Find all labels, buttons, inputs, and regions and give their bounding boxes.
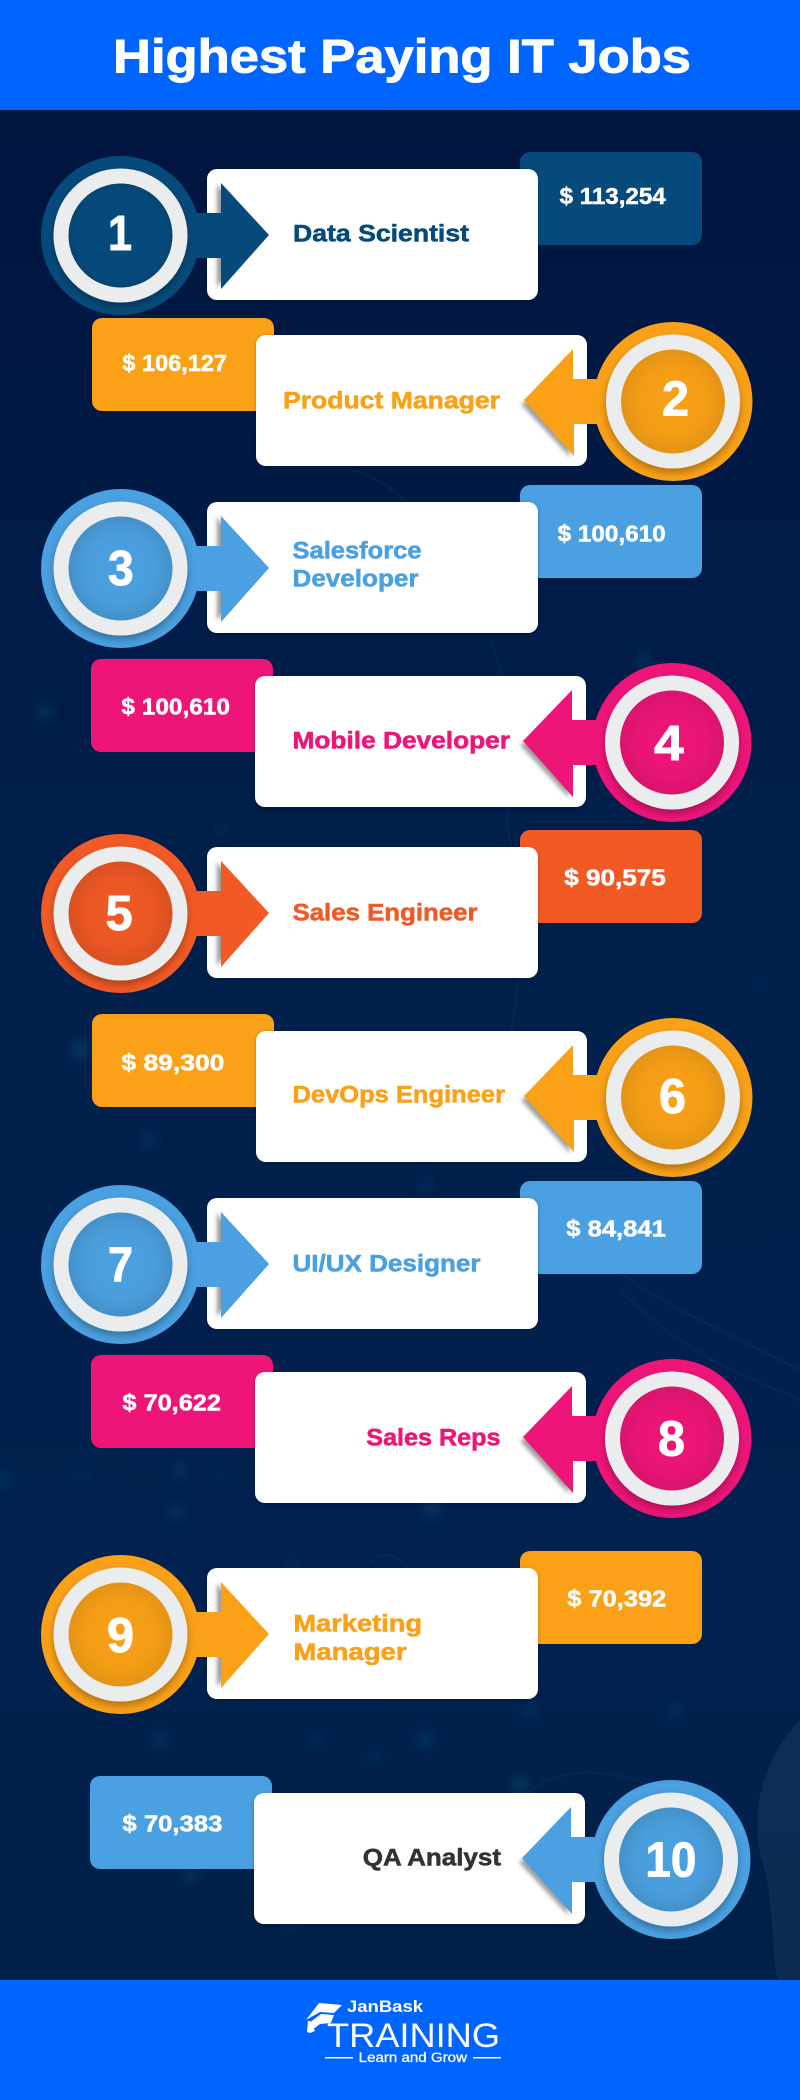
job title: Salesforce xyxy=(292,537,422,564)
badge disc xyxy=(592,1780,750,1939)
arrow xyxy=(523,690,639,797)
logo xyxy=(306,1997,501,2065)
icon: graduation cap xyxy=(306,2003,342,2033)
card xyxy=(207,1198,538,1329)
rank number: 5 xyxy=(106,887,133,941)
rank number: 8 xyxy=(658,1413,685,1467)
badge ring xyxy=(54,168,188,302)
rank number: 6 xyxy=(659,1070,686,1124)
arrow xyxy=(170,1582,269,1688)
arrow shadow xyxy=(520,1412,569,1494)
salary box xyxy=(92,1014,274,1107)
rank number: 2 xyxy=(662,373,689,427)
job title: Developer xyxy=(292,566,419,593)
salary: $ 70,392 xyxy=(567,1586,666,1612)
item 3: Salesforce Developer xyxy=(41,485,702,648)
job title xyxy=(293,1611,422,1666)
salary: $ 70,383 xyxy=(122,1811,222,1837)
arrow shadow xyxy=(519,1833,568,1915)
tagline rule right xyxy=(473,2057,501,2058)
item 8: Sales Reps xyxy=(91,1355,752,1518)
badge disc xyxy=(41,156,200,315)
item 4: Mobile Developer xyxy=(91,659,752,822)
badge center xyxy=(620,1386,724,1490)
badge center xyxy=(621,1046,725,1150)
badge ring xyxy=(606,1030,740,1164)
badge disc xyxy=(41,1185,200,1344)
badge center xyxy=(620,690,724,794)
card xyxy=(256,335,587,466)
rank number: 10 xyxy=(645,1834,696,1888)
job title: Sales Reps xyxy=(366,1425,500,1452)
badge center xyxy=(68,1582,172,1686)
badge center xyxy=(68,516,172,620)
card xyxy=(254,1793,585,1924)
card xyxy=(207,1568,538,1699)
job title: Mobile Developer xyxy=(292,727,510,754)
rank number: 3 xyxy=(108,542,134,596)
item 9: Marketing Manager xyxy=(41,1551,702,1714)
salary: $ 100,610 xyxy=(121,694,230,720)
arrow shadow xyxy=(217,862,258,966)
item 6: DevOps Engineer xyxy=(92,1014,752,1177)
salary box xyxy=(92,318,274,411)
arrow xyxy=(523,1386,639,1493)
badge center xyxy=(68,862,172,966)
job title: Data Scientist xyxy=(293,221,469,248)
salary box xyxy=(520,1181,702,1274)
badge center xyxy=(621,350,725,454)
wordmark: TRAINING xyxy=(327,2017,500,2055)
card xyxy=(255,676,586,807)
arrow shadow xyxy=(217,184,258,288)
badge disc xyxy=(592,663,752,822)
arrow shadow xyxy=(217,517,258,621)
tagline rule left xyxy=(325,2057,353,2058)
job title: Manager xyxy=(293,1639,407,1666)
job title: Sales Engineer xyxy=(292,899,478,926)
arrow shadow xyxy=(217,1583,258,1687)
footer bar xyxy=(0,1980,800,2100)
badge ring xyxy=(54,846,188,980)
badge ring xyxy=(606,334,740,468)
salary: $ 100,610 xyxy=(558,521,666,547)
badge ring xyxy=(605,1372,739,1506)
job title: UI/UX Designer xyxy=(292,1251,481,1278)
salary: $ 113,254 xyxy=(560,183,666,209)
salary box xyxy=(520,152,702,245)
card xyxy=(207,847,538,978)
badge ring xyxy=(604,1792,738,1926)
item 1: Data Scientist xyxy=(41,152,702,315)
arrow xyxy=(170,1212,269,1318)
badge disc xyxy=(592,1359,752,1518)
badge ring xyxy=(605,676,739,810)
job title: DevOps Engineer xyxy=(292,1082,505,1109)
badge ring xyxy=(54,502,188,636)
salary box xyxy=(520,830,702,923)
job title: Product Manager xyxy=(283,388,500,415)
arrow shadow xyxy=(217,1213,258,1317)
arrow shadow xyxy=(521,1071,570,1153)
rank number: 4 xyxy=(654,717,684,771)
badge disc xyxy=(594,1018,752,1177)
salary box xyxy=(520,1551,702,1644)
brand name: JanBask xyxy=(347,1997,424,2016)
salary: $ 106,127 xyxy=(122,350,227,376)
badge disc xyxy=(594,322,752,481)
badge ring xyxy=(54,1198,188,1332)
job title: Marketing xyxy=(293,1611,422,1638)
job title: QA Analyst xyxy=(363,1845,501,1872)
card xyxy=(207,169,538,300)
tagline: Learn and Grow xyxy=(359,2050,467,2065)
salary box xyxy=(91,1355,273,1448)
arrow xyxy=(522,1807,638,1914)
job title xyxy=(292,537,422,593)
salary: $ 84,841 xyxy=(566,1216,666,1242)
salary box xyxy=(91,659,273,752)
salary: $ 89,300 xyxy=(121,1050,224,1076)
badge center xyxy=(68,1212,172,1316)
salary: $ 90,575 xyxy=(564,865,666,891)
card xyxy=(255,1372,586,1503)
rank number: 1 xyxy=(108,207,132,261)
arrow xyxy=(170,183,269,289)
header bar xyxy=(0,0,800,110)
item 5: Sales Engineer xyxy=(41,830,702,993)
arrow xyxy=(524,1045,640,1152)
arrow xyxy=(170,861,269,967)
badge ring xyxy=(54,1568,188,1702)
card xyxy=(256,1031,587,1162)
badge center xyxy=(68,184,172,288)
badge center xyxy=(619,1808,723,1912)
arrow xyxy=(170,516,269,622)
badge disc xyxy=(41,489,200,648)
badge disc xyxy=(41,1555,200,1714)
item 7: UI/UX Designer xyxy=(41,1181,702,1344)
salary: $ 70,622 xyxy=(122,1390,221,1416)
arrow shadow xyxy=(520,716,569,798)
item 10: QA Analyst xyxy=(90,1776,750,1939)
item 2: Product Manager xyxy=(92,318,752,481)
title: Highest Paying IT Jobs xyxy=(113,30,691,82)
rank number: 7 xyxy=(108,1239,133,1293)
arrow shadow xyxy=(521,375,570,457)
salary box xyxy=(520,485,702,578)
arrow xyxy=(524,349,640,456)
badge disc xyxy=(41,834,200,993)
rank number: 9 xyxy=(107,1609,134,1663)
card xyxy=(207,502,538,633)
salary box xyxy=(90,1776,272,1869)
